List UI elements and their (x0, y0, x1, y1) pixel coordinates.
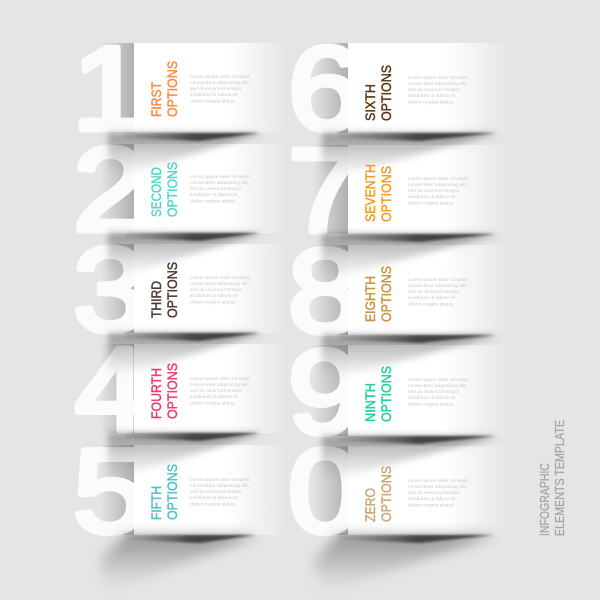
heading: fifth options: OPTIONS (164, 464, 180, 520)
text block: dolore magna aliqua. (408, 99, 454, 105)
heading: zero options: ZERO (362, 488, 378, 522)
text block (408, 176, 469, 206)
text block (408, 478, 469, 508)
heading: second options (148, 162, 180, 217)
heading: zero options: OPTIONS (378, 466, 394, 522)
heading: seventh options: SEVENTH (362, 164, 378, 222)
heading: seventh options (362, 164, 394, 222)
heading: second options: SECOND (148, 167, 164, 217)
heading: zero options (362, 466, 394, 522)
text block: incididunt ut labore et (408, 93, 456, 99)
side title: INFOGRAPHIC (538, 463, 552, 536)
text block (408, 377, 469, 407)
text block (190, 376, 251, 406)
numeral 0: 0 (288, 425, 362, 557)
text block: incididunt ut labore et (190, 495, 238, 501)
text block: sed do eiusmod tempor (190, 388, 242, 394)
text block: Lorem ipsum dolor sit amet, (190, 477, 251, 483)
numeral 6: 6 (288, 22, 362, 155)
text block: consectetur adipisicing elit, (408, 283, 467, 289)
heading: eighth options: OPTIONS (378, 266, 394, 322)
side title: ELEMENTS TEMPLATE (553, 420, 567, 536)
text block: dolore magna aliqua. (408, 301, 454, 307)
text block: Lorem ipsum dolor sit amet, (408, 75, 469, 81)
cast shadow from panel above (322, 234, 498, 280)
heading: sixth options: OPTIONS (378, 65, 394, 121)
text block: sed do eiusmod tempor (190, 489, 242, 495)
text block: incididunt ut labore et (190, 394, 238, 400)
text block: sed do eiusmod tempor (190, 86, 242, 92)
heading: fourth options: FOURTH (148, 368, 164, 419)
text block (190, 74, 251, 104)
text block: dolore magna aliqua. (190, 198, 236, 204)
panel: 9 ninth options (288, 326, 510, 458)
text block: incididunt ut labore et (190, 192, 238, 198)
text block: Lorem ipsum dolor sit amet, (190, 174, 251, 180)
cast shadow from panel above (322, 335, 498, 381)
heading: ninth options (362, 366, 394, 422)
cast shadow below panel (100, 535, 258, 592)
text block: Lorem ipsum dolor sit amet, (408, 478, 469, 484)
text block: dolore magna aliqua. (190, 400, 236, 406)
text block: dolore magna aliqua. (190, 501, 236, 507)
text block: incididunt ut labore et (408, 395, 456, 401)
heading: third options: OPTIONS (164, 262, 180, 318)
text block: sed do eiusmod tempor (190, 287, 242, 293)
heading: eighth options: EIGHTH (362, 276, 378, 322)
cast shadow from panel above (108, 333, 262, 378)
numeral 7: 7 (288, 124, 362, 257)
cast shadow from panel above (108, 433, 262, 479)
heading: sixth options (362, 65, 394, 121)
heading: ninth options: NINTH (362, 383, 378, 422)
side title (538, 420, 567, 536)
panel: 0 zero options (288, 425, 510, 594)
numeral 8: 8 (288, 225, 362, 357)
numeral 4: 4 (75, 324, 146, 456)
text block: consectetur adipisicing elit, (190, 281, 249, 287)
text block: consectetur adipisicing elit, (408, 484, 467, 490)
text block: sed do eiusmod tempor (190, 186, 242, 192)
text block: incididunt ut labore et (408, 496, 456, 502)
text block: consectetur adipisicing elit, (408, 383, 467, 389)
heading: fourth options: OPTIONS (164, 363, 180, 419)
text block: Lorem ipsum dolor sit amet, (190, 376, 251, 382)
text block: sed do eiusmod tempor (408, 289, 460, 295)
cast shadow from panel above (322, 133, 498, 179)
text block (190, 275, 251, 305)
text block (190, 174, 251, 204)
text block: Lorem ipsum dolor sit amet, (408, 176, 469, 182)
text block: consectetur adipisicing elit, (190, 80, 249, 86)
panel: 1 first options (72, 22, 290, 155)
heading: ninth options: OPTIONS (378, 366, 394, 422)
heading: sixth options: SIXTH (362, 84, 378, 121)
cast shadow from panel above (108, 133, 262, 178)
text block: Lorem ipsum dolor sit amet, (408, 377, 469, 383)
text block (408, 277, 469, 307)
numeral 2: 2 (73, 123, 147, 256)
heading: seventh options: OPTIONS (378, 166, 394, 222)
text block: dolore magna aliqua. (190, 98, 236, 104)
text block: dolore magna aliqua. (408, 401, 454, 407)
text block: sed do eiusmod tempor (408, 490, 460, 496)
text block: Lorem ipsum dolor sit amet, (190, 275, 251, 281)
text block (408, 75, 469, 105)
heading: third options: THIRD (148, 281, 164, 318)
text block: dolore magna aliqua. (190, 299, 236, 305)
numeral 1: 1 (72, 22, 146, 155)
heading: first options (148, 61, 180, 117)
text block: incididunt ut labore et (190, 92, 238, 98)
panel: 5 fifth options (73, 425, 290, 592)
text block: consectetur adipisicing elit, (190, 483, 249, 489)
panel: 2 second options (73, 123, 290, 256)
text block: dolore magna aliqua. (408, 502, 454, 508)
panel: 3 third options (73, 223, 290, 356)
text block: Lorem ipsum dolor sit amet, (408, 277, 469, 283)
heading: first options: OPTIONS (164, 61, 180, 117)
text block: sed do eiusmod tempor (408, 87, 460, 93)
heading: fifth options (148, 464, 180, 520)
numeral 9: 9 (288, 326, 362, 458)
text block: consectetur adipisicing elit, (408, 182, 467, 188)
heading: second options: OPTIONS (164, 162, 180, 217)
panel: 4 fourth options (75, 324, 290, 456)
text block: incididunt ut labore et (408, 295, 456, 301)
heading: third options (148, 262, 180, 318)
panel: 6 sixth options (288, 22, 510, 155)
heading: fifth options: FIFTH (148, 486, 164, 520)
panel: 7 seventh options (288, 124, 510, 257)
heading: first options: FIRST (148, 82, 164, 117)
text block: consectetur adipisicing elit, (190, 180, 249, 186)
text block: consectetur adipisicing elit, (190, 382, 249, 388)
text block: dolore magna aliqua. (408, 200, 454, 206)
text block: incididunt ut labore et (408, 194, 456, 200)
text block: incididunt ut labore et (190, 293, 238, 299)
cast shadow from panel above (108, 233, 262, 278)
numeral 5: 5 (73, 425, 147, 557)
text block: Lorem ipsum dolor sit amet, (190, 74, 251, 80)
heading: eighth options (362, 266, 394, 322)
text block: consectetur adipisicing elit, (408, 81, 467, 87)
panel: 8 eighth options (288, 225, 510, 357)
cast shadow below panel (314, 535, 496, 594)
text block: sed do eiusmod tempor (408, 188, 460, 194)
heading: fourth options (148, 363, 180, 419)
cast shadow from panel above (322, 436, 498, 482)
text block: sed do eiusmod tempor (408, 389, 460, 395)
text block (190, 477, 251, 507)
numeral 3: 3 (73, 223, 147, 356)
